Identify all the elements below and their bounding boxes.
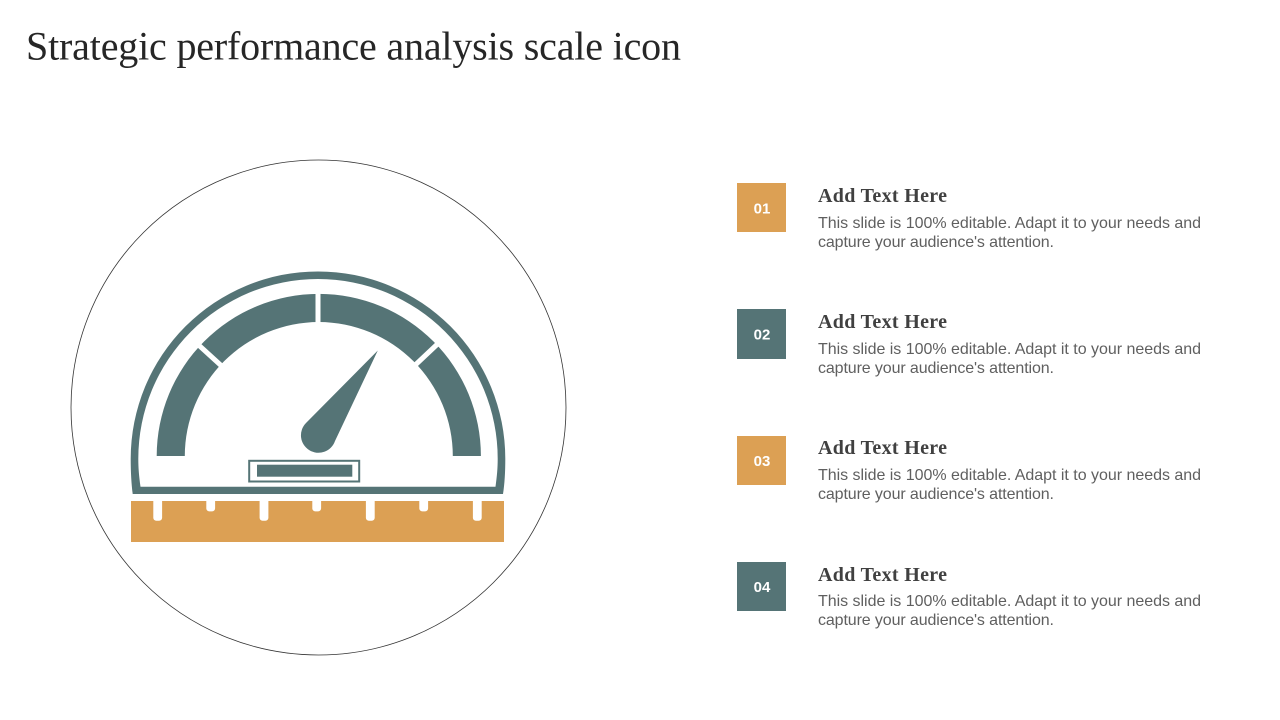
number badge 03: 03: [754, 453, 770, 470]
icon: gauge dial segments: [157, 285, 481, 456]
icon: gauge readout: [249, 461, 359, 482]
icon: ruler: [131, 498, 504, 542]
heading 01: Add Text Here: [818, 185, 947, 207]
body text 03: capture your audience's attention.: [818, 486, 1054, 503]
list item 04: [737, 562, 1201, 629]
body text 04: capture your audience's attention.: [818, 612, 1054, 629]
number badge 04: [737, 562, 786, 611]
list item 01: [737, 183, 1201, 251]
heading 04: Add Text Here: [818, 564, 947, 586]
circle outline: [71, 160, 566, 655]
body text 03: This slide is 100% editable. Adapt it to your needs and: [818, 467, 1201, 484]
number badge 01: 01: [754, 200, 770, 218]
body text 02: [818, 341, 1201, 377]
icon: gauge housing: [131, 271, 505, 494]
body text 02: capture your audience's attention.: [818, 360, 1054, 377]
body text 01: [818, 215, 1201, 251]
title: Strategic performance analysis scale icon: [26, 24, 681, 68]
list item 02: [737, 309, 1201, 377]
number badge 02: [737, 309, 786, 359]
heading 02: Add Text Here: [818, 311, 947, 333]
body text 03: [818, 467, 1201, 503]
icon: gauge needle: [301, 350, 378, 453]
number badge 04: 04: [754, 579, 771, 596]
body text 01: capture your audience's attention.: [818, 234, 1054, 251]
number badge 01: [737, 183, 786, 232]
body text 02: This slide is 100% editable. Adapt it to your needs and: [818, 341, 1201, 358]
body text 01: This slide is 100% editable. Adapt it to your needs and: [818, 215, 1201, 232]
list item 03: [737, 436, 1201, 503]
body text 04: This slide is 100% editable. Adapt it to your needs and: [818, 593, 1201, 610]
number badge 02: 02: [754, 326, 770, 344]
panel: scale icon in circle: [71, 160, 566, 655]
heading 03: Add Text Here: [818, 437, 947, 459]
number badge 03: [737, 436, 786, 485]
body text 04: [818, 593, 1201, 629]
